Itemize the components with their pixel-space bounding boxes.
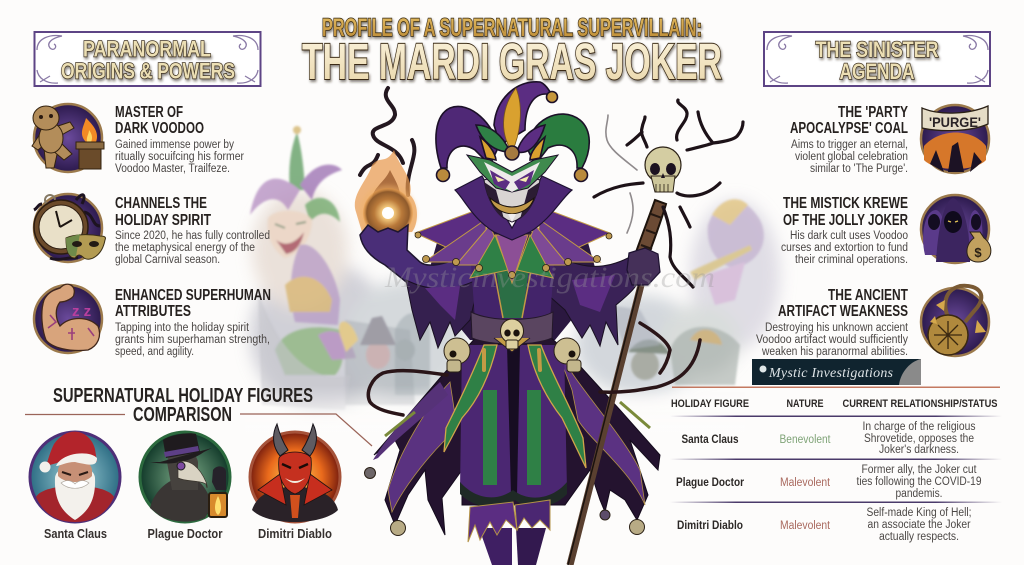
title: Profile of a Supernatural Supervillain: THE MARDI GRAS JOKER (302, 33, 722, 90)
table row: Plague Doctor (676, 464, 982, 500)
lower tendrils (368, 323, 700, 415)
collar bells (415, 232, 612, 278)
right coat panel (555, 345, 645, 505)
heading: mistick krewe: THE MISTICK KREWE (783, 195, 908, 212)
panel heading: Paranormal Origins & Powers (34, 32, 260, 86)
label: Santa Claus: Santa Claus (44, 526, 107, 541)
heading: channels the holiday spirit: CHANNELS THE (115, 195, 207, 212)
face and mask (467, 155, 558, 222)
heading line 2: ARTIFACT WEAKNESS (778, 303, 908, 320)
panel: supernatural holiday figures comparison (25, 385, 372, 541)
heading: ancient artifact: THE ANCIENT (828, 287, 908, 304)
body: voodoo text: Gained immense power by (115, 139, 234, 151)
heading line 2: DARK VOODOO (115, 120, 204, 137)
body: party apocalypse text (791, 139, 908, 175)
body: party apocalypse text: Aims to trigger an eternal, (791, 139, 908, 151)
right sleeve highlight (572, 275, 615, 312)
portrait: Dimitri Diablo (250, 424, 340, 522)
right hand (627, 248, 660, 285)
heading: enhanced superhuman attributes: ENHANCED SUPERHUMAN (115, 287, 271, 304)
panel heading: The Sinister Agenda: AGENDA (840, 59, 914, 84)
right arm and sleeve (548, 250, 640, 346)
table header row: NATURE (786, 398, 824, 410)
title: Profile of a Supernatural Supervillain (302, 14, 722, 90)
heading line 2: HOLIDAY SPIRIT (115, 212, 211, 229)
table row: Plague Doctor: Malevolent (780, 477, 831, 489)
sorcery flame (355, 150, 417, 232)
heading: comparison (53, 385, 313, 426)
heading line 2: APOCALYPSE' COAL (790, 120, 908, 137)
body: holiday spirit text: the metaphysical energy of the (115, 242, 255, 254)
panel: origins and powers (32, 104, 271, 358)
hem skull bells (364, 468, 644, 536)
body: ancient artifact text (756, 322, 909, 358)
table row: Dimitri Diablo: Malevolent (780, 520, 831, 532)
body: party apocalypse text: similar to 'The Purge'. (810, 163, 908, 175)
watermark: Mysticinvestigations.com (384, 261, 715, 294)
background: faded carnival crowd (245, 126, 780, 435)
torso stripes (493, 265, 532, 318)
body: voodoo text: ritually socuifcing his former (115, 151, 244, 163)
collar star points (415, 205, 610, 283)
left arm and hand (360, 225, 488, 298)
table row: Dimitri Diablo: an associate the Joker (868, 519, 971, 531)
body: attributes text: grants him superhaman strength, (115, 334, 270, 346)
panel heading: Paranormal Origins & Powers: ORIGINS & POWERS (61, 58, 235, 84)
icon: hooded cult and money bag: $ (974, 245, 982, 260)
table row: Santa Claus: Santa Claus (682, 432, 739, 446)
table row: Plague Doctor: pandemis. (896, 488, 942, 500)
body: ancient artifact text: weaken his paranormal abilities. (761, 346, 908, 358)
table row: Plague Doctor: ties following the COVID-19 (856, 476, 982, 488)
heading: master of dark voodoo: MASTER OF (115, 104, 183, 121)
right hip skull (554, 338, 581, 372)
heading: party apocalypse: THE 'PARTY (838, 104, 908, 121)
high collar (455, 176, 572, 240)
table row: Santa Claus: Joker's darkness. (879, 444, 959, 456)
table row: Santa Claus: Benevolent (780, 434, 831, 446)
table row: Dimitri Diablo: Dimitri Diablo (677, 518, 743, 532)
magic orb (360, 185, 416, 241)
icon: hooded cult and money bag (921, 195, 991, 263)
jester hat (436, 82, 589, 182)
table row: Santa Claus: In charge of the religious (862, 421, 976, 433)
body: attributes text: speed, and agility. (115, 346, 194, 358)
body: mistick krewe text: their criminal operations. (795, 254, 908, 266)
heading: comparison: COMPARISON (133, 404, 232, 426)
table: holiday figures comparison (670, 386, 1002, 543)
smoke tendrils above orb (360, 88, 414, 195)
heading line 2: ATTRIBUTES (115, 303, 191, 320)
hanging charms (484, 350, 540, 370)
heading: comparison: SUPERNATURAL HOLIDAY FIGURES (53, 385, 313, 407)
coat tails (374, 335, 660, 535)
icon: flexed arm: z z (72, 303, 91, 320)
icon: purge banner (921, 105, 989, 173)
table header row: HOLIDAY FIGURE (671, 398, 749, 410)
icon: flexed arm (34, 284, 102, 353)
body: voodoo text: Voodoo Master, Trailfeze. (115, 163, 230, 175)
body: attributes text (115, 322, 270, 358)
left green panel (444, 345, 497, 452)
body: ancient artifact text: Destroying his unknown accient (765, 322, 909, 334)
tail trim (385, 402, 650, 436)
torso (470, 250, 555, 320)
icon: broken artifact amulet (921, 286, 989, 356)
body: party apocalypse text: violent global celebration (795, 151, 908, 163)
staff skull (645, 147, 681, 192)
torso detail (495, 262, 530, 318)
striped trousers (460, 345, 567, 507)
grey wisps (606, 115, 637, 233)
body: mistick krewe text: curses and extortion to fund (781, 242, 908, 254)
body: holiday spirit text (115, 230, 270, 266)
table row: Dimitri Diablo: Self-made King of Hell; (866, 507, 972, 519)
table row: Santa Claus: Shrovetide, opposes the (864, 433, 974, 445)
illustration: Mardi Gras Joker (355, 82, 743, 565)
right green panel (528, 345, 586, 468)
body: holiday spirit text: global Carnival season. (115, 254, 220, 266)
belt (471, 312, 553, 352)
body: attributes text: Tapping into the holiday spirit (115, 322, 250, 334)
body: voodoo text (115, 139, 244, 175)
icon: purge banner: 'PURGE' (929, 114, 981, 130)
left sleeve (406, 278, 480, 348)
icon: voodoo doll and altar (32, 104, 104, 172)
logo: Mystic Investigations (752, 359, 921, 385)
body: mistick krewe text: His dark cult uses Voodoo (790, 230, 908, 242)
boots (468, 500, 550, 565)
panel heading: The Sinister Agenda (764, 32, 990, 86)
left hip skull (444, 338, 470, 372)
table row: Dimitri Diablo (677, 507, 972, 543)
icon: pocket watch and mask (34, 194, 105, 262)
left sleeve highlight (425, 286, 460, 320)
left coat panel (388, 382, 455, 512)
portrait: Plague Doctor (140, 432, 230, 522)
table row: Dimitri Diablo: actually respects. (879, 531, 959, 543)
panel heading: The Sinister Agenda: THE SINISTER (816, 37, 938, 62)
table row: Plague Doctor: Former ally, the Joker cut (862, 464, 977, 476)
logo: Mystic Investigations: Mystic Investigations (768, 366, 894, 381)
body: ancient artifact text: Voodoo artifact would sufficiently (756, 334, 908, 346)
panel heading: Paranormal Origins & Powers: PARANORMAL (83, 36, 211, 62)
torso and shoulders backing (425, 232, 600, 340)
table row: Plague Doctor: Plague Doctor (676, 475, 744, 489)
table row: Santa Claus (682, 421, 976, 456)
label: Plague Doctor: Plague Doctor (148, 526, 222, 541)
panel: the sinister agenda (756, 104, 991, 358)
body: mistick krewe text (781, 230, 908, 266)
left tail tip (373, 382, 448, 460)
tendrils from skull (594, 100, 743, 287)
heading line 2: OF THE JOLLY JOKER (783, 212, 908, 229)
title: Profile of a Supernatural Supervillain: PROFILE OF A SUPERNATURAL SUPERVILLAIN: (322, 14, 702, 42)
staff (568, 200, 666, 565)
portrait: Santa Claus (30, 432, 120, 522)
table header row (671, 398, 998, 410)
table header row: CURRENT RELATIONSHIP/STATUS (842, 398, 998, 410)
label: Dimitri Diablo: Dimitri Diablo (258, 526, 332, 541)
belt skull (500, 319, 524, 349)
body: holiday spirit text: Since 2020, he has fully controlled (115, 230, 270, 242)
